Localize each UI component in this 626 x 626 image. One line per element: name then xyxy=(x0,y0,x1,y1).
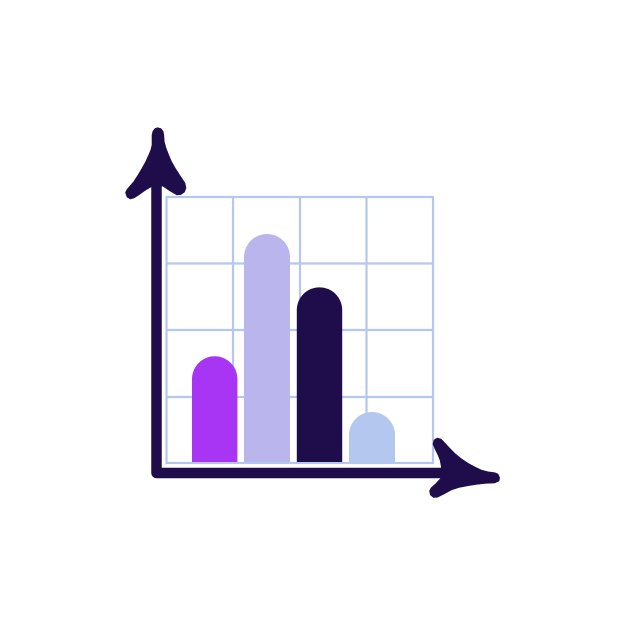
arrow: horizontal axis head xyxy=(430,438,500,498)
bar 1: purple xyxy=(192,356,237,462)
bar 3: dark indigo xyxy=(297,287,342,462)
arrow: vertical axis head xyxy=(126,128,186,199)
bar 4: light blue xyxy=(349,412,395,462)
bar 2: lavender xyxy=(244,234,290,462)
axes xyxy=(156,185,445,473)
chart grid xyxy=(166,197,433,463)
